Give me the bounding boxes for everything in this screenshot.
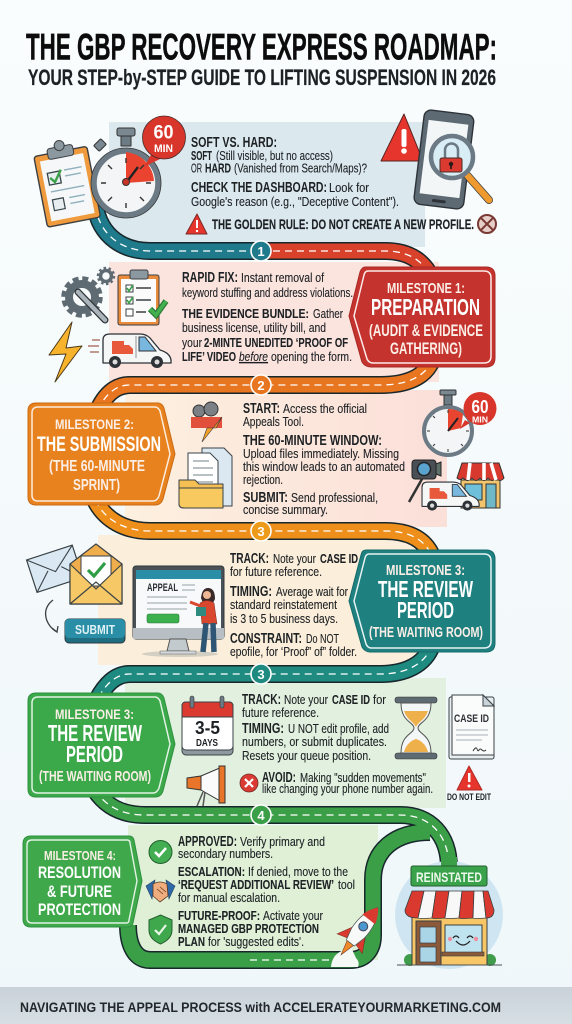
callout: avoid: AVOID: xyxy=(262,770,296,786)
panel background: diagnosis xyxy=(109,122,425,247)
icon: protection shield xyxy=(149,915,172,944)
callout: avoid: Making "sudden movements" xyxy=(300,770,426,785)
icon: video camera on tripod xyxy=(409,460,441,502)
milestone 3 badge teal: MILESTONE 3: xyxy=(386,562,465,579)
text block: track timing: TRACK: xyxy=(242,692,281,708)
milestone 3 badge green: (THE WAITING ROOM) xyxy=(39,768,151,785)
text block: track timing: Note your xyxy=(284,692,329,707)
illustration: reinstated storefront xyxy=(395,857,503,969)
text block: rapid fix and evidence bundle: keyword stuffing and address violations. xyxy=(182,285,353,300)
text block: rapid fix and evidence bundle: your xyxy=(182,335,203,350)
icon: clipboard checklist xyxy=(32,136,101,227)
callout: golden rule xyxy=(186,214,496,234)
text block: soft vs hard: Look for xyxy=(329,180,370,195)
milestone 4 badge: & FUTURE xyxy=(47,882,112,901)
text block: track timing: CASE ID xyxy=(332,692,370,707)
step marker 3 second xyxy=(251,664,271,684)
text block: track timing: Resets your queue position. xyxy=(242,748,371,763)
icon: yellow envelope with check card xyxy=(70,544,122,604)
icon: hourglass xyxy=(395,697,437,759)
store window with smiling face xyxy=(442,925,484,956)
panel: milestone 1 content xyxy=(49,268,353,382)
icon: case id document xyxy=(449,695,494,759)
step marker 2 xyxy=(251,375,271,395)
icon: calendar 3-5 days: 3-5 xyxy=(195,718,220,738)
text block: soft vs hard: (Vanished from Search/Maps)? xyxy=(234,160,367,176)
footer bar: NAVIGATING THE APPEAL PROCESS with ACCELERATEYOURMARKETING.COM xyxy=(20,1000,501,1015)
icon: lightning bolt xyxy=(49,322,82,382)
milestone 4 badge: RESOLUTION xyxy=(38,863,121,882)
text block: submission steps: rejection. xyxy=(243,472,283,487)
text block: approved escalation future-proof: If denied, move to the xyxy=(248,864,348,879)
step marker 2: 2 xyxy=(257,378,265,393)
icon: phone with magnifier and lock xyxy=(413,109,489,210)
icon: 60 min bubble: 60 xyxy=(154,122,174,144)
text block: submission steps xyxy=(243,401,405,517)
icon: handshake xyxy=(146,880,175,902)
icon: monitor appeal screen with person xyxy=(133,566,224,657)
text block: soft vs hard: HARD xyxy=(205,160,231,176)
text block: rapid fix and evidence bundle: before xyxy=(239,349,268,364)
store awning xyxy=(405,891,494,918)
text block: track timing constraint: CASE ID xyxy=(320,551,358,566)
step marker 1 xyxy=(251,241,271,261)
milestone 3 badge green: MILESTONE 3: xyxy=(55,706,134,722)
text block: approved escalation future-proof: ESCALATION: xyxy=(178,864,245,879)
text block: submission steps: Send professional, xyxy=(291,490,378,505)
text block: track timing constraint: epofile, for ‘Proof” of” folder. xyxy=(230,644,357,659)
text block: track timing constraint: Average wait for xyxy=(276,584,349,599)
icon: folder with documents xyxy=(179,448,232,508)
text block: approved escalation future-proof: FUTURE-PROOF: xyxy=(178,908,260,923)
icon: megaphone xyxy=(187,766,225,806)
panel background: review track xyxy=(98,535,430,665)
text block: approved escalation future-proof xyxy=(178,834,355,949)
icon: stopwatch with 60 min: 60 xyxy=(472,397,488,417)
step marker 3: 3 xyxy=(257,524,265,539)
button: submit: SUBMIT xyxy=(75,623,115,637)
roadmap road xyxy=(95,205,449,960)
text block: soft vs hard xyxy=(191,135,399,209)
footer bar xyxy=(0,987,572,1024)
text block: approved escalation future-proof: for 'suggested edits'. xyxy=(208,934,304,949)
icon: stopwatch with 60 min xyxy=(424,390,496,455)
text block: submission steps: Upload files immediately. Missing xyxy=(243,446,399,461)
text block: rapid fix and evidence bundle: Gather xyxy=(313,306,344,321)
milestone 3 badge teal: THE REVIEW xyxy=(378,576,473,602)
step marker 3 xyxy=(251,521,271,541)
milestone 4 badge: PROTECTION xyxy=(38,900,121,919)
milestone 1 badge: GATHERING) xyxy=(390,339,462,358)
milestone 2 badge: (THE 60-MINUTE xyxy=(49,458,145,475)
text block: track timing: U NOT edit profile, add xyxy=(288,721,389,736)
text block: track timing constraint: TRACK: xyxy=(230,551,269,567)
text block: soft vs hard: SOFT VS. HARD: xyxy=(191,135,277,151)
milestone 4 badge xyxy=(23,836,142,927)
icon: calendar 3-5 days: DAYS xyxy=(196,738,218,749)
step marker 4 xyxy=(251,805,271,825)
text block: track timing constraint: TIMING: xyxy=(230,584,272,600)
milestone 1 badge xyxy=(349,267,495,367)
text block: soft vs hard: (Still visible, but no access) xyxy=(216,148,333,163)
icon: red warning triangle xyxy=(381,114,423,161)
panel: soft vs hard diagnosis xyxy=(32,109,496,234)
text block: submission steps: this window leads to an automated xyxy=(243,459,405,474)
callout: avoid xyxy=(240,770,433,796)
milestone 3 badge teal: PERIOD xyxy=(397,597,454,623)
text block: track timing: TIMING: xyxy=(242,721,284,737)
text block: rapid fix and evidence bundle: LIFE’ VIDEO xyxy=(182,349,236,364)
store building xyxy=(412,910,487,965)
icon: stopwatch xyxy=(91,128,161,218)
step marker 4: 4 xyxy=(257,808,265,823)
text block: soft vs hard: SOFT xyxy=(191,148,212,163)
milestone 4 badge: MILESTONE 4: xyxy=(44,848,116,863)
sign: reinstated: REINSTATED xyxy=(416,869,482,885)
text block: approved escalation future-proof: Verify primary and xyxy=(240,834,325,849)
text block: track timing constraint: Note your xyxy=(273,551,317,566)
icon: checklist clipboard xyxy=(118,270,166,325)
milestone 3 badge teal xyxy=(349,550,495,652)
text block: submission steps: Appeals Tool. xyxy=(243,414,304,429)
panel background: review timing xyxy=(125,678,446,808)
text block: rapid fix and evidence bundle: 2-MINTE UNEDITED ‘PROOF OF xyxy=(204,335,348,350)
text block: submission steps: SUBMIT: xyxy=(243,490,288,506)
text block: rapid fix and evidence bundle: Instant removal of xyxy=(241,270,324,285)
icon: small van xyxy=(422,482,479,511)
text block: soft vs hard: Google's reason (e.g., "Deceptive Content"). xyxy=(191,194,399,209)
milestone 2 badge xyxy=(28,403,175,505)
icon: case id document: CASE ID xyxy=(454,713,489,725)
step marker 1: 1 xyxy=(257,244,265,259)
icon: calendar 3-5 days xyxy=(182,696,233,755)
panel: review timing content xyxy=(182,692,494,806)
text block: track timing constraint: CONSTRAINT: xyxy=(230,631,302,647)
callout: avoid: like changing your phone number again. xyxy=(262,781,433,796)
icon: approved check circle xyxy=(149,840,172,864)
callout: do not edit warning: DO NOT EDIT xyxy=(447,792,491,803)
text block: rapid fix and evidence bundle: THE EVIDENCE BUNDLE: xyxy=(182,306,309,321)
text block: approved escalation future-proof: ‘REQUEST ADDITIONAL REVIEW’ xyxy=(178,877,334,892)
milestone 3 badge green: PERIOD xyxy=(66,741,123,767)
text block: submission steps: concise summary. xyxy=(243,502,328,517)
panel: review track content xyxy=(27,544,358,659)
text block: approved escalation future-proof: secondary numbers. xyxy=(178,846,273,861)
milestone 1 badge: MILESTONE 1: xyxy=(387,280,465,297)
milestone 3 badge teal: (THE WAITING ROOM) xyxy=(369,624,483,641)
panel: resolution content xyxy=(146,834,391,967)
text block: approved escalation future-proof: PLAN xyxy=(178,934,205,949)
icon: 60 min bubble: MIN xyxy=(154,143,173,155)
store door xyxy=(416,921,441,965)
milestone 2 badge: THE SUBMISSION xyxy=(37,433,161,456)
text block: track timing: numbers, or submit duplicates. xyxy=(242,734,387,749)
callout: golden rule: THE GOLDEN RULE: DO NOT CREATE A NEW PROFILE. xyxy=(212,217,474,232)
icon: gears and wrench xyxy=(64,268,114,320)
text block: soft vs hard: OR xyxy=(191,160,202,176)
button: submit xyxy=(65,619,125,643)
step marker 3 second: 3 xyxy=(257,667,265,682)
panel background: milestone 1 xyxy=(109,262,439,382)
milestone 3 badge green xyxy=(28,693,175,797)
text block: track timing constraint xyxy=(230,551,358,659)
text block: track timing: for xyxy=(373,692,387,707)
icon: blue envelope xyxy=(27,545,83,592)
icon: stopwatch with 60 min: MIN xyxy=(472,414,488,424)
icon: store front xyxy=(457,463,504,508)
callout: do not edit warning xyxy=(447,766,491,803)
milestone 1 badge: (AUDIT & EVIDENCE xyxy=(369,321,483,340)
text block: approved escalation future-proof: for manual escalation. xyxy=(178,890,280,905)
milestone 2 badge: SPRINT) xyxy=(73,477,120,494)
icon: 60 min bubble xyxy=(142,116,186,167)
panel background: milestone 4 xyxy=(128,825,378,960)
text block: submission steps: Access the official xyxy=(283,401,367,416)
text block: track timing constraint: for future reference. xyxy=(230,564,322,579)
text block: rapid fix and evidence bundle xyxy=(182,270,353,364)
icon: monitor appeal screen with person: APPEAL xyxy=(147,582,178,594)
text block: track timing: future reference. xyxy=(242,705,319,720)
icon: camera with bolt xyxy=(191,402,222,442)
milestone 1 badge: PREPARATION xyxy=(371,294,480,320)
title xyxy=(26,26,497,90)
text block: track timing constraint: Do NOT xyxy=(306,631,339,646)
text block: soft vs hard: CHECK THE DASHBOARD: xyxy=(191,180,327,196)
panel background: milestone 2 xyxy=(125,390,447,527)
text block: rapid fix and evidence bundle: RAPID FIX: xyxy=(182,270,238,286)
arrow: to submit button xyxy=(46,600,58,632)
text block: approved escalation future-proof: Activate your xyxy=(263,908,324,923)
text block: track timing xyxy=(242,692,389,763)
text block: rapid fix and evidence bundle: opening the form. xyxy=(271,349,352,364)
icon: delivery van xyxy=(88,334,171,368)
milestone 2 badge: MILESTONE 2: xyxy=(55,416,134,432)
text block: approved escalation future-proof: MANAGED GBP PROTECTION xyxy=(178,921,319,936)
panel: milestone 2 content xyxy=(179,390,504,517)
milestone 3 badge green: THE REVIEW xyxy=(48,720,142,746)
text block: approved escalation future-proof: tool xyxy=(338,877,355,892)
text block: submission steps: THE 60-MINUTE WINDOW: xyxy=(243,433,382,449)
text block: track timing constraint: is 3 to 5 business days. xyxy=(230,611,338,626)
icon: rocket xyxy=(328,898,391,967)
text block: rapid fix and evidence bundle: business license, utility bill, and xyxy=(182,320,326,335)
text block: approved escalation future-proof: APPROVED: xyxy=(178,834,237,850)
text block: track timing constraint: standard reinstatement xyxy=(230,597,337,612)
text block: submission steps: START: xyxy=(243,401,280,417)
